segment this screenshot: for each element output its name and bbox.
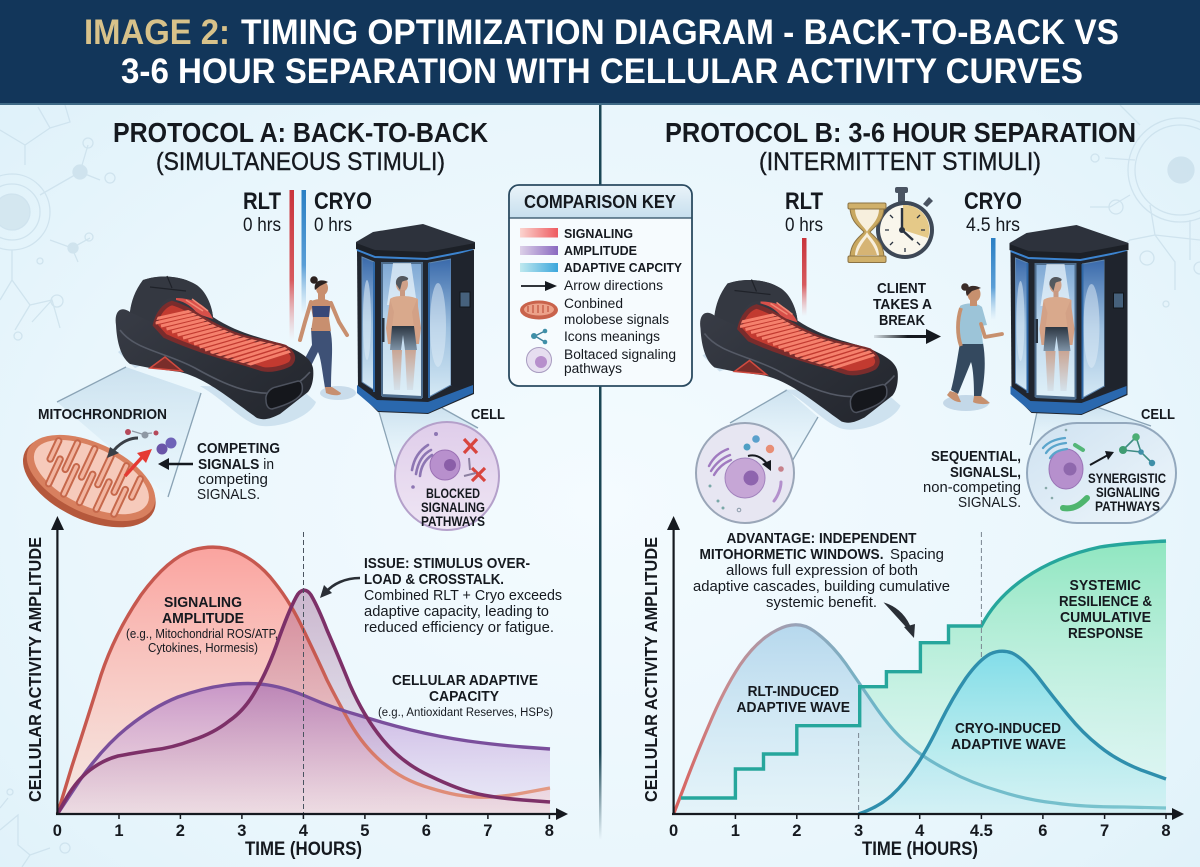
area: cellular capacity bbox=[57, 684, 550, 814]
panel: comparison key bbox=[509, 185, 692, 386]
label: cell B: CELL bbox=[1141, 406, 1175, 423]
label: cellular adaptive capacity: CAPACITY bbox=[429, 688, 499, 705]
axes: protocol A: 7 bbox=[483, 822, 492, 840]
heading: protocol B bbox=[665, 117, 1136, 176]
axes: protocol B: 1 bbox=[731, 822, 740, 840]
central divider bbox=[599, 105, 602, 840]
heading: protocol B: PROTOCOL B: 3-6 HOUR SEPARATION bbox=[665, 117, 1136, 148]
label: mitochondrion: MITOCHRONDRION bbox=[38, 406, 167, 423]
panel: comparison key: Icons meanings bbox=[564, 329, 660, 344]
line: combined bbox=[57, 590, 550, 814]
label: systemic resilience: CUMULATIVE bbox=[1060, 609, 1151, 626]
illustration: blocked cell: SIGNALING bbox=[421, 500, 485, 515]
label: client takes a break bbox=[873, 280, 932, 329]
line: cryo wave bbox=[859, 651, 1166, 814]
label: client takes a break: TAKES A bbox=[873, 296, 932, 313]
panel: comparison key: SIGNALING bbox=[564, 226, 633, 241]
panel: comparison key: COMPARISON KEY bbox=[524, 192, 676, 212]
label: signaling amplitude: Cytokines, Hormesis) bbox=[148, 641, 258, 655]
illustration: synergistic cell: SYNERGISTIC bbox=[1088, 471, 1166, 486]
illustration: red light therapy bed A bbox=[116, 276, 316, 426]
axes: protocol B: 3 bbox=[854, 822, 863, 840]
illustration: blocked cell: PATHWAYS bbox=[421, 514, 485, 529]
illustration: red light therapy bed B bbox=[700, 280, 900, 430]
illustration: synergistic cell bbox=[1027, 423, 1176, 523]
callout: advantage: Spacing bbox=[890, 546, 944, 563]
text: sequential signals: SIGNALS. bbox=[958, 494, 1021, 511]
arrow: competing signals bbox=[158, 458, 193, 470]
label: cellular adaptive capacity: CELLULAR ADAPTIVE bbox=[392, 672, 538, 689]
text: sequential signals: SEQUENTIAL, bbox=[931, 448, 1021, 465]
label: RLT wave bbox=[736, 683, 850, 716]
title banner bbox=[0, 0, 1200, 105]
panel: comparison key: AMPLITUDE bbox=[564, 243, 637, 258]
label: cryo wave bbox=[951, 720, 1066, 753]
title banner: IMAGE 2: bbox=[84, 13, 230, 52]
callout: advantage bbox=[693, 530, 950, 611]
label: signaling amplitude: AMPLITUDE bbox=[162, 610, 244, 627]
timing labels protocol B: 0 hrs bbox=[785, 215, 823, 236]
text: competing signals: SIGNALS. bbox=[197, 486, 260, 503]
title banner: TIMING OPTIMIZATION DIAGRAM - BACK-TO-BACK VS bbox=[241, 13, 1119, 52]
axes: protocol A: 6 bbox=[422, 822, 431, 840]
timing labels protocol B: 4.5 hrs bbox=[966, 215, 1020, 236]
text: competing signals bbox=[197, 440, 280, 503]
callout: issue: ISSUE: STIMULUS OVER- bbox=[364, 555, 530, 572]
area: combined overshoot bbox=[57, 590, 550, 814]
text: sequential signals: SIGNALSL, bbox=[950, 464, 1021, 481]
illustration: cryo cabin B bbox=[1010, 225, 1128, 415]
axes: protocol A: 3 bbox=[237, 822, 246, 840]
timing labels protocol A: 0 hrs bbox=[314, 215, 352, 236]
arrow: break bbox=[874, 329, 941, 344]
line: RLT wave bbox=[674, 625, 1166, 814]
timing labels protocol A bbox=[243, 188, 372, 340]
label: signaling amplitude bbox=[126, 594, 278, 655]
icon: hourglass and stopwatch bbox=[848, 187, 934, 262]
figure: woman walking A bbox=[300, 276, 356, 400]
zoom cone: bed to mitochondrion bbox=[57, 367, 201, 497]
illustration: blocked cell: BLOCKED bbox=[426, 486, 480, 501]
zoom cone: bed to cell B bbox=[730, 390, 818, 463]
illustration: blocked cell bbox=[395, 422, 499, 530]
axes: protocol B: 0 bbox=[669, 822, 678, 840]
panel: comparison key: ADAPTIVE CAPCITY bbox=[564, 260, 682, 275]
illustration: synergistic cell: SIGNALING bbox=[1096, 485, 1160, 500]
heading: protocol A bbox=[113, 117, 488, 176]
label: RLT wave: ADAPTIVE WAVE bbox=[736, 699, 850, 716]
label: cell A: CELL bbox=[471, 406, 505, 423]
callout: issue: LOAD & CROSSTALK. bbox=[364, 571, 504, 588]
axes: protocol A bbox=[25, 516, 568, 860]
panel: comparison key: Arrow directions bbox=[564, 278, 663, 293]
heading: protocol B: (INTERMITTENT STIMULI) bbox=[759, 148, 1041, 176]
callout: advantage: ADVANTAGE: INDEPENDENT bbox=[726, 530, 916, 547]
label: cryo wave: CRYO-INDUCED bbox=[955, 720, 1061, 737]
axes: protocol A: 2 bbox=[176, 822, 185, 840]
axes: protocol B: 4 bbox=[915, 822, 925, 840]
line: signaling bbox=[57, 547, 550, 814]
axes: protocol A: 1 bbox=[114, 822, 124, 840]
text: competing signals: COMPETING bbox=[197, 440, 280, 457]
axes: protocol B: 6 bbox=[1038, 822, 1047, 840]
axes: protocol A: 0 bbox=[53, 822, 62, 840]
axes: protocol A: 5 bbox=[360, 822, 369, 840]
label: signaling amplitude: SIGNALING bbox=[164, 594, 242, 611]
callout: issue: reduced efficiency or fatigue. bbox=[364, 619, 554, 636]
panel: comparison key: Conbined bbox=[564, 296, 623, 311]
label: cellular adaptive capacity bbox=[378, 672, 553, 719]
arrow: issue to peak bbox=[320, 578, 360, 598]
axes: protocol A: 8 bbox=[545, 822, 554, 840]
callout: issue: Combined RLT + Cryo exceeds bbox=[364, 587, 562, 604]
text: competing signals: SIGNALS in bbox=[198, 456, 274, 473]
area: cumulative response bbox=[860, 541, 1166, 814]
line: cumulative steps bbox=[681, 541, 1166, 798]
axes: protocol A: CELLULAR ACTIVITY AMPLITUDE bbox=[25, 537, 45, 802]
label: client takes a break: CLIENT bbox=[877, 280, 926, 297]
chart: protocol A curves bbox=[57, 532, 550, 814]
axes: protocol B bbox=[641, 516, 1184, 860]
label: RLT wave: RLT-INDUCED bbox=[748, 683, 839, 700]
illustration: synergistic cell: PATHWAYS bbox=[1095, 499, 1160, 514]
axes: protocol B: TIME (HOURS) bbox=[862, 839, 978, 860]
area: RLT wave bbox=[674, 625, 1166, 814]
axes: protocol B: 2 bbox=[792, 822, 801, 840]
label: signaling amplitude: (e.g., Mitochondrial ROS/ATP, bbox=[126, 627, 278, 641]
callout: issue: adaptive capacity, leading to bbox=[364, 603, 549, 620]
callout: advantage: systemic benefit. bbox=[766, 594, 877, 611]
label: client takes a break: BREAK bbox=[879, 312, 925, 329]
timing labels protocol B: CRYO bbox=[964, 188, 1022, 215]
label: cryo wave: ADAPTIVE WAVE bbox=[951, 736, 1066, 753]
line: capacity bbox=[57, 684, 550, 814]
axes: protocol B: 4.5 bbox=[970, 822, 993, 840]
arrow: advantage to steps bbox=[886, 604, 915, 638]
timing labels protocol B: RLT bbox=[785, 188, 823, 215]
area: cryo wave bbox=[859, 651, 1166, 814]
text: sequential signals: non-competing bbox=[923, 479, 1021, 496]
zoom cone: cabin to cell B2 bbox=[1030, 406, 1151, 445]
timing labels protocol A: 0 hrs bbox=[243, 215, 281, 236]
timing labels protocol A: RLT bbox=[243, 188, 281, 215]
text: competing signals: competing bbox=[198, 471, 268, 488]
timing labels protocol B bbox=[785, 188, 1022, 320]
illustration: cell B bbox=[696, 423, 794, 523]
panel: comparison key: molobese signals bbox=[564, 312, 669, 327]
panel: comparison key: Boltaced signaling bbox=[564, 347, 676, 362]
label: systemic resilience: RESPONSE bbox=[1068, 625, 1143, 642]
area: signaling amplitude bbox=[57, 547, 550, 814]
heading: protocol A: PROTOCOL A: BACK-TO-BACK bbox=[113, 117, 488, 148]
label: systemic resilience bbox=[1059, 577, 1152, 642]
axes: protocol A: TIME (HOURS) bbox=[245, 839, 362, 860]
axes: protocol B: 8 bbox=[1161, 822, 1171, 840]
callout: advantage: MITOHORMETIC WINDOWS. bbox=[700, 546, 884, 563]
callout: issue bbox=[364, 555, 562, 636]
title banner: 3-6 HOUR SEPARATION WITH CELLULAR ACTIVITY CURVES bbox=[121, 52, 1083, 91]
heading: protocol A: (SIMULTANEOUS STIMULI) bbox=[156, 148, 445, 176]
callout: advantage: adaptive cascades, building cumulative bbox=[693, 578, 950, 595]
text: sequential signals bbox=[923, 448, 1021, 511]
label: cellular adaptive capacity: (e.g., Antioxidant Reserves, HSPs) bbox=[378, 705, 553, 719]
panel: comparison key: pathways bbox=[564, 361, 622, 376]
chart: protocol B curves bbox=[674, 532, 1166, 814]
illustration: cryo cabin A bbox=[356, 224, 475, 414]
axes: protocol B: 7 bbox=[1100, 822, 1109, 840]
timing labels protocol A: CRYO bbox=[314, 188, 372, 215]
callout: advantage: allows full expression of both bbox=[726, 562, 918, 579]
figure: client walking B bbox=[943, 283, 1002, 411]
zoom cone: cabin to cell A bbox=[379, 408, 478, 470]
illustration: mitochondrion bbox=[9, 416, 177, 546]
label: systemic resilience: RESILIENCE & bbox=[1059, 593, 1152, 610]
label: systemic resilience: SYSTEMIC bbox=[1070, 577, 1141, 594]
axes: protocol B: CELLULAR ACTIVITY AMPLITUDE bbox=[641, 537, 661, 802]
axes: protocol A: 4 bbox=[299, 822, 309, 840]
